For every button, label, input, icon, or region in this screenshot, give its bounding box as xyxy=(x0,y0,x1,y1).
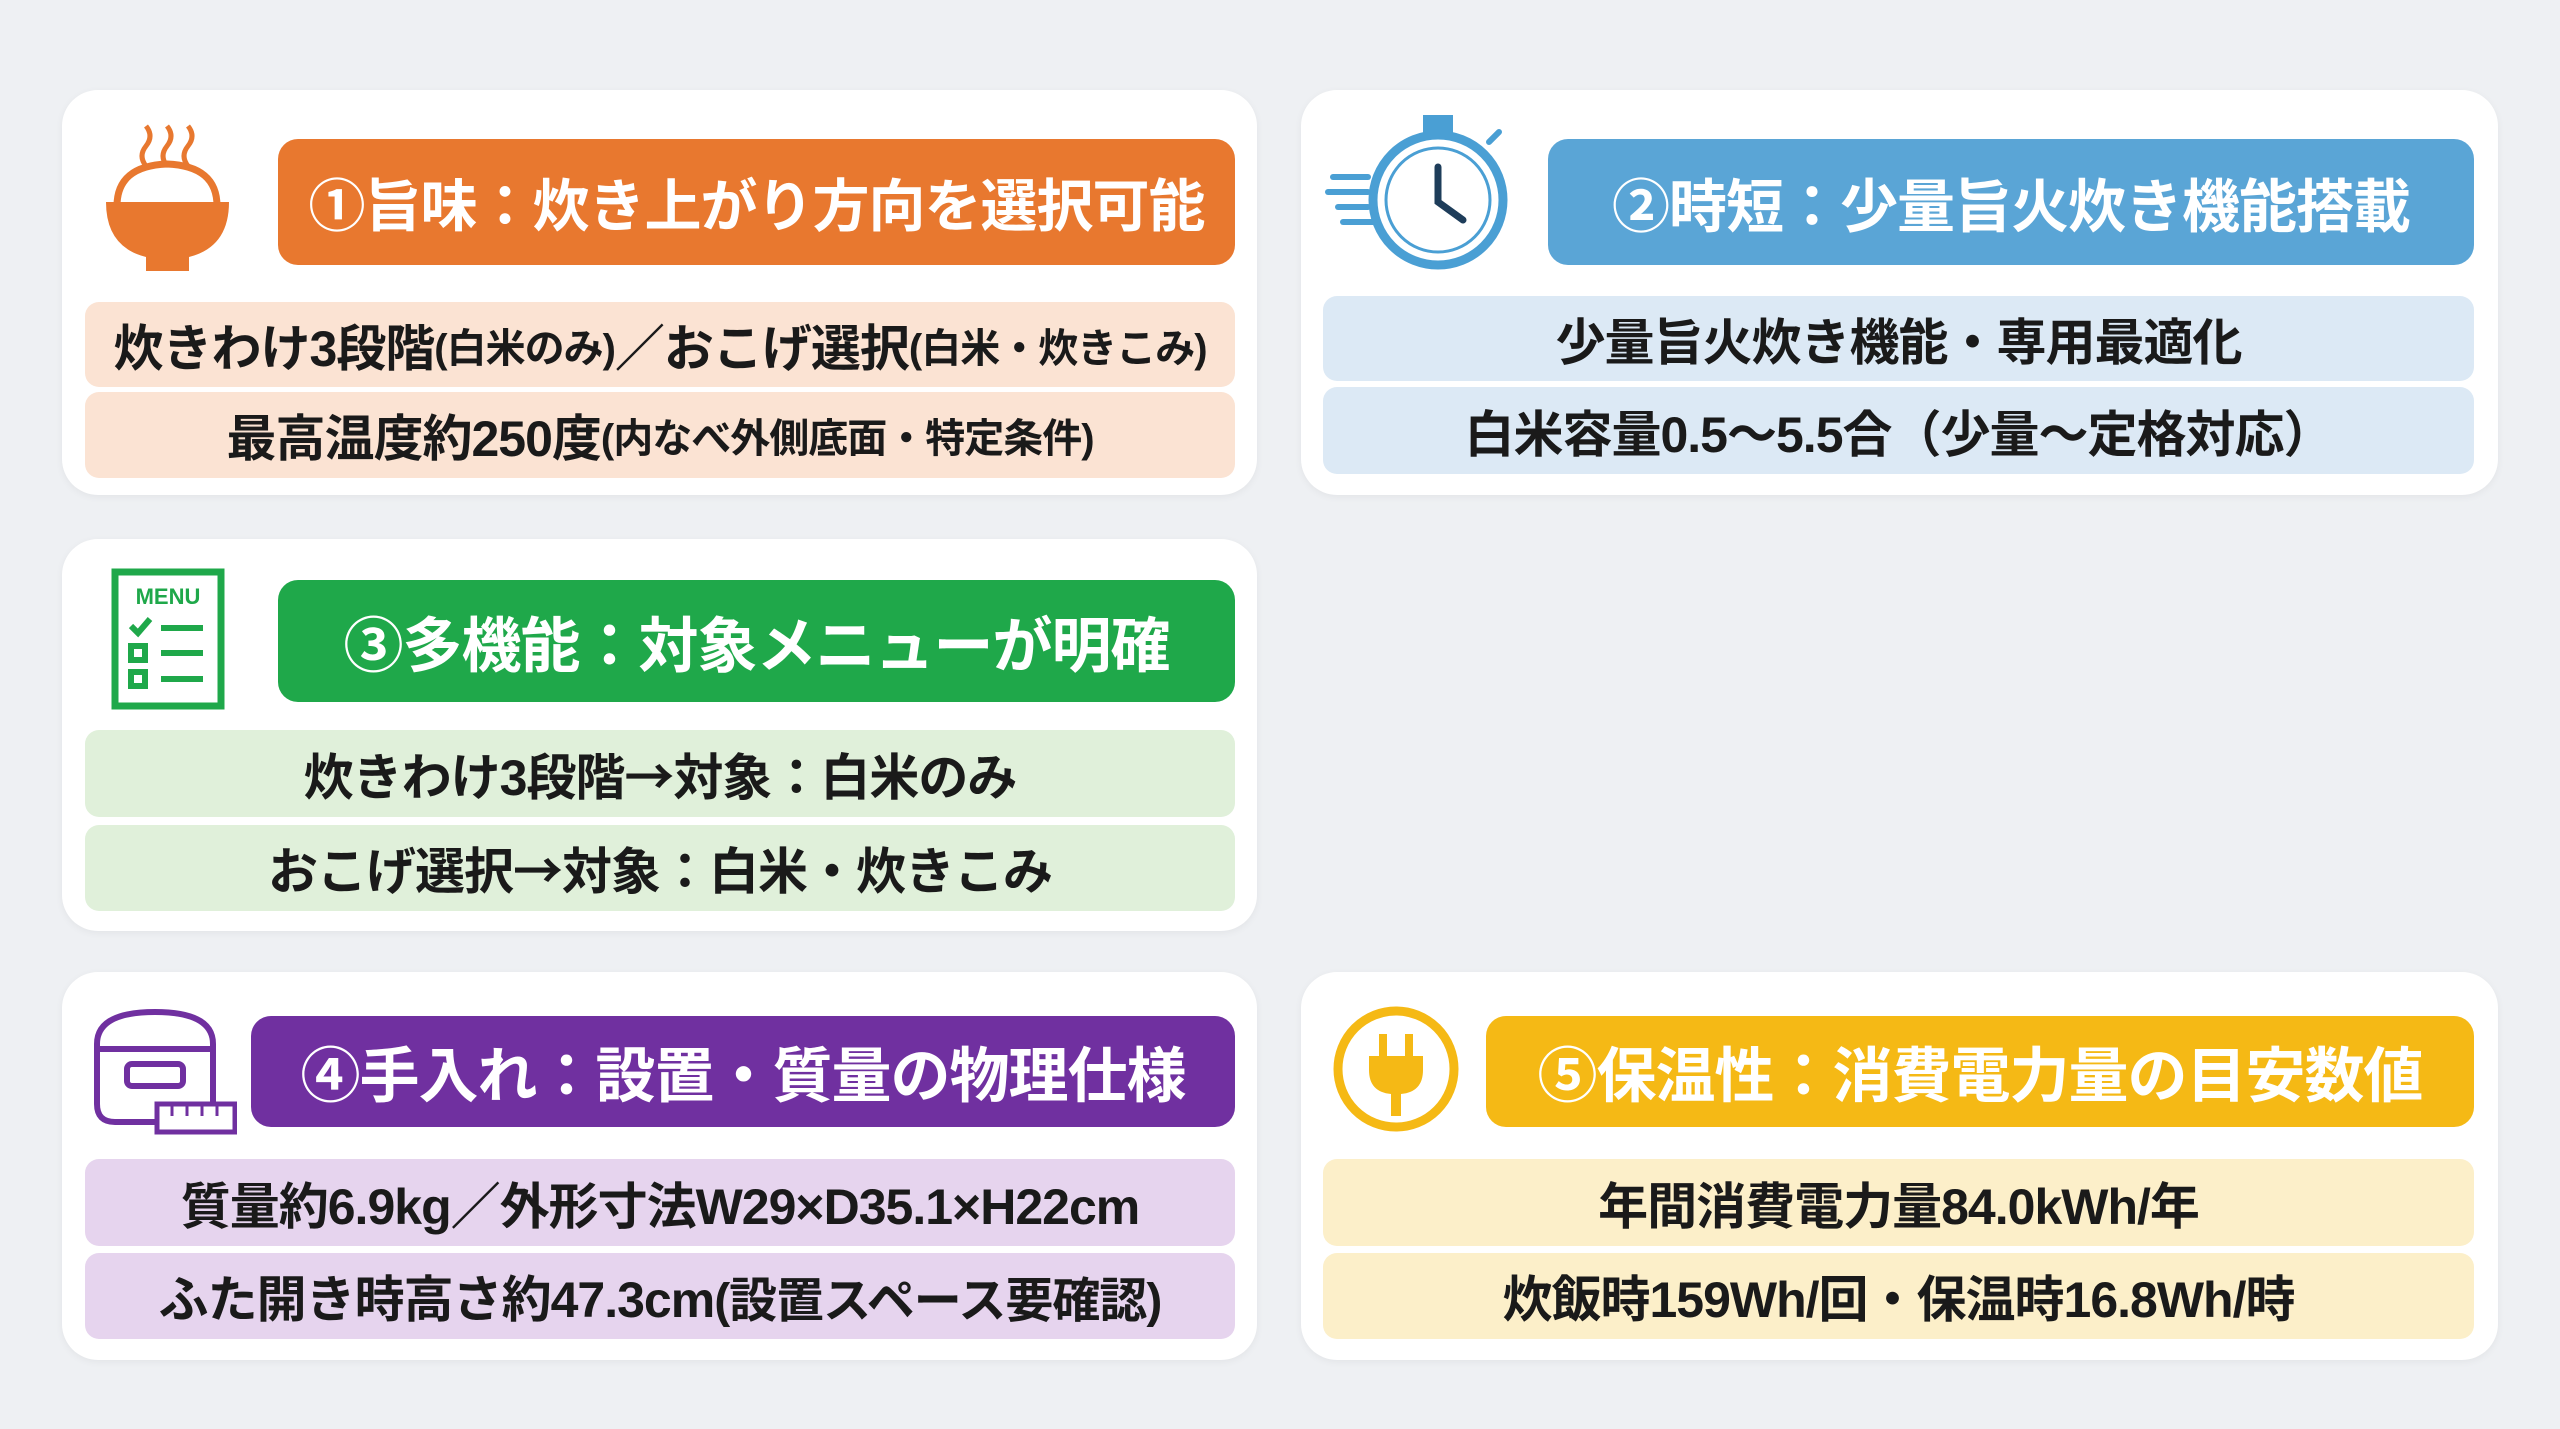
row: time 2 xyxy=(1323,387,2474,474)
row: maint 2 xyxy=(85,1253,1235,1339)
header: keep warm: ⑤保温性：消費電力量の目安数値 xyxy=(1538,1043,2422,1110)
panel: keep warm xyxy=(1301,972,2498,1360)
header: maintenance xyxy=(251,1016,1235,1127)
row: warm 2: 炊飯時159Wh/回・保温時16.8Wh/時 xyxy=(1502,1272,2294,1328)
panel: maintenance xyxy=(62,972,1257,1360)
row: warm 1: 年間消費電力量84.0kWh/年 xyxy=(1598,1178,2199,1234)
header: umami xyxy=(278,139,1235,265)
header: maintenance: ④手入れ：設置・質量の物理仕様 xyxy=(300,1043,1186,1110)
row: warm 2 xyxy=(1323,1253,2474,1339)
header: time saving: ②時短：少量旨火炊き機能搭載 xyxy=(1612,175,2410,240)
icon: rice bowl xyxy=(106,124,229,271)
row: multi 2: おこげ選択 対象：白米・炊きこみ xyxy=(268,844,1052,900)
row: multi 1: 炊きわけ3段階 対象：白米のみ xyxy=(304,750,1016,806)
row: maint 2: ふた開き時高さ約47.3cm xyxy=(159,1272,714,1328)
row: umami 2: (内なべ外側底面・特定条件) xyxy=(601,417,1094,461)
row: multi 1: → xyxy=(624,738,673,810)
panel: umami xyxy=(62,90,1257,495)
panel: time saving xyxy=(1301,90,2498,495)
row: umami 1: (白米・炊きこみ) xyxy=(909,326,1207,370)
row: maint 1 xyxy=(85,1159,1235,1246)
row: warm 1 xyxy=(1323,1159,2474,1246)
header: keep warm xyxy=(1486,1016,2474,1127)
row: umami 1: 炊きわけ3段階 ／おこげ選択 xyxy=(113,320,909,376)
row: time 1: 少量旨火炊き機能・専用最適化 xyxy=(1556,314,2242,370)
row: time 1 xyxy=(1323,296,2474,381)
header: umami: ①旨味：炊き上がり方向を選択可能 xyxy=(308,175,1204,239)
header: multi function: ③多機能：対象メニューが明確 xyxy=(344,612,1170,680)
icon: menu xyxy=(112,568,224,710)
icon: plug xyxy=(1334,1006,1458,1132)
row: umami 1: (白米のみ) xyxy=(434,326,615,370)
icon: rice cooker xyxy=(94,1009,237,1134)
icon: menu: MENU xyxy=(136,584,200,609)
row: umami 2 xyxy=(85,392,1235,478)
row: time 2: 白米容量0.5〜5.5合（少量〜定格対応） xyxy=(1464,406,2332,462)
row: multi 2 xyxy=(85,825,1235,911)
icon: stopwatch xyxy=(1325,115,1508,270)
row: multi 1 xyxy=(85,730,1235,817)
row: umami 2: 最高温度約250度 xyxy=(226,411,601,467)
header: time saving xyxy=(1548,139,2474,265)
header: multi function xyxy=(278,580,1235,702)
row: maint 2: (設置スペース要確認) xyxy=(714,1275,1161,1328)
row: umami 1 xyxy=(85,302,1235,387)
row: multi 2: → xyxy=(513,832,562,904)
row: maint 1: 質量約6.9kg／外形寸法W29×D35.1×H22cm xyxy=(181,1178,1139,1234)
panel: multi function xyxy=(62,539,1257,931)
